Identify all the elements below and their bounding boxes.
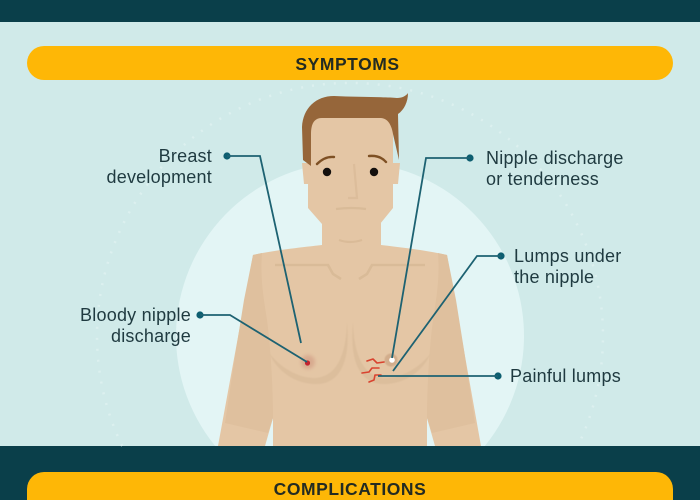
light circle bbox=[176, 162, 524, 446]
heading: symptoms bbox=[27, 46, 673, 80]
figure: man bbox=[218, 93, 481, 446]
right nipple bbox=[384, 354, 398, 366]
heading: symptoms: SYMPTOMS bbox=[295, 54, 400, 74]
callout: lumps under the nipple: Lumps under bbox=[514, 246, 621, 266]
callout: breast development bbox=[106, 146, 301, 343]
callout: lumps under the nipple bbox=[393, 246, 621, 371]
right chest fold bbox=[352, 322, 431, 384]
mouth bbox=[336, 208, 366, 209]
callout: nipple discharge or tenderness: Nipple discharge bbox=[486, 148, 624, 168]
hair bbox=[302, 93, 408, 166]
callout: bloody nipple discharge: discharge bbox=[111, 326, 191, 346]
left nipple bbox=[301, 355, 315, 369]
body silhouette bbox=[218, 205, 481, 446]
eyes bbox=[323, 168, 331, 176]
top band bbox=[0, 0, 700, 22]
dotted ring bbox=[97, 83, 603, 446]
callout: breast development: Breast bbox=[159, 146, 212, 166]
bottom band bbox=[0, 446, 700, 500]
stretch marks bbox=[362, 359, 384, 382]
neck shadow bbox=[339, 240, 362, 242]
upper arms shade bbox=[225, 253, 273, 433]
left chest fold bbox=[269, 322, 348, 384]
collarbones bbox=[275, 265, 425, 279]
callout: lumps under the nipple: the nipple bbox=[514, 267, 594, 287]
heading: complications: COMPLICATIONS bbox=[274, 479, 426, 499]
eyebrows bbox=[317, 156, 386, 164]
ears and head bbox=[302, 163, 400, 184]
heading: complications bbox=[27, 472, 673, 500]
callout: bloody nipple discharge: Bloody nipple bbox=[80, 305, 191, 325]
nose bbox=[348, 164, 357, 198]
callout: nipple discharge or tenderness: or tenderness bbox=[486, 169, 599, 189]
callout: nipple discharge or tenderness bbox=[392, 148, 624, 358]
callout: painful lumps bbox=[378, 366, 621, 386]
callout: bloody nipple discharge bbox=[80, 305, 307, 362]
callout: breast development: development bbox=[106, 167, 212, 187]
callout: painful lumps: Painful lumps bbox=[510, 366, 621, 386]
